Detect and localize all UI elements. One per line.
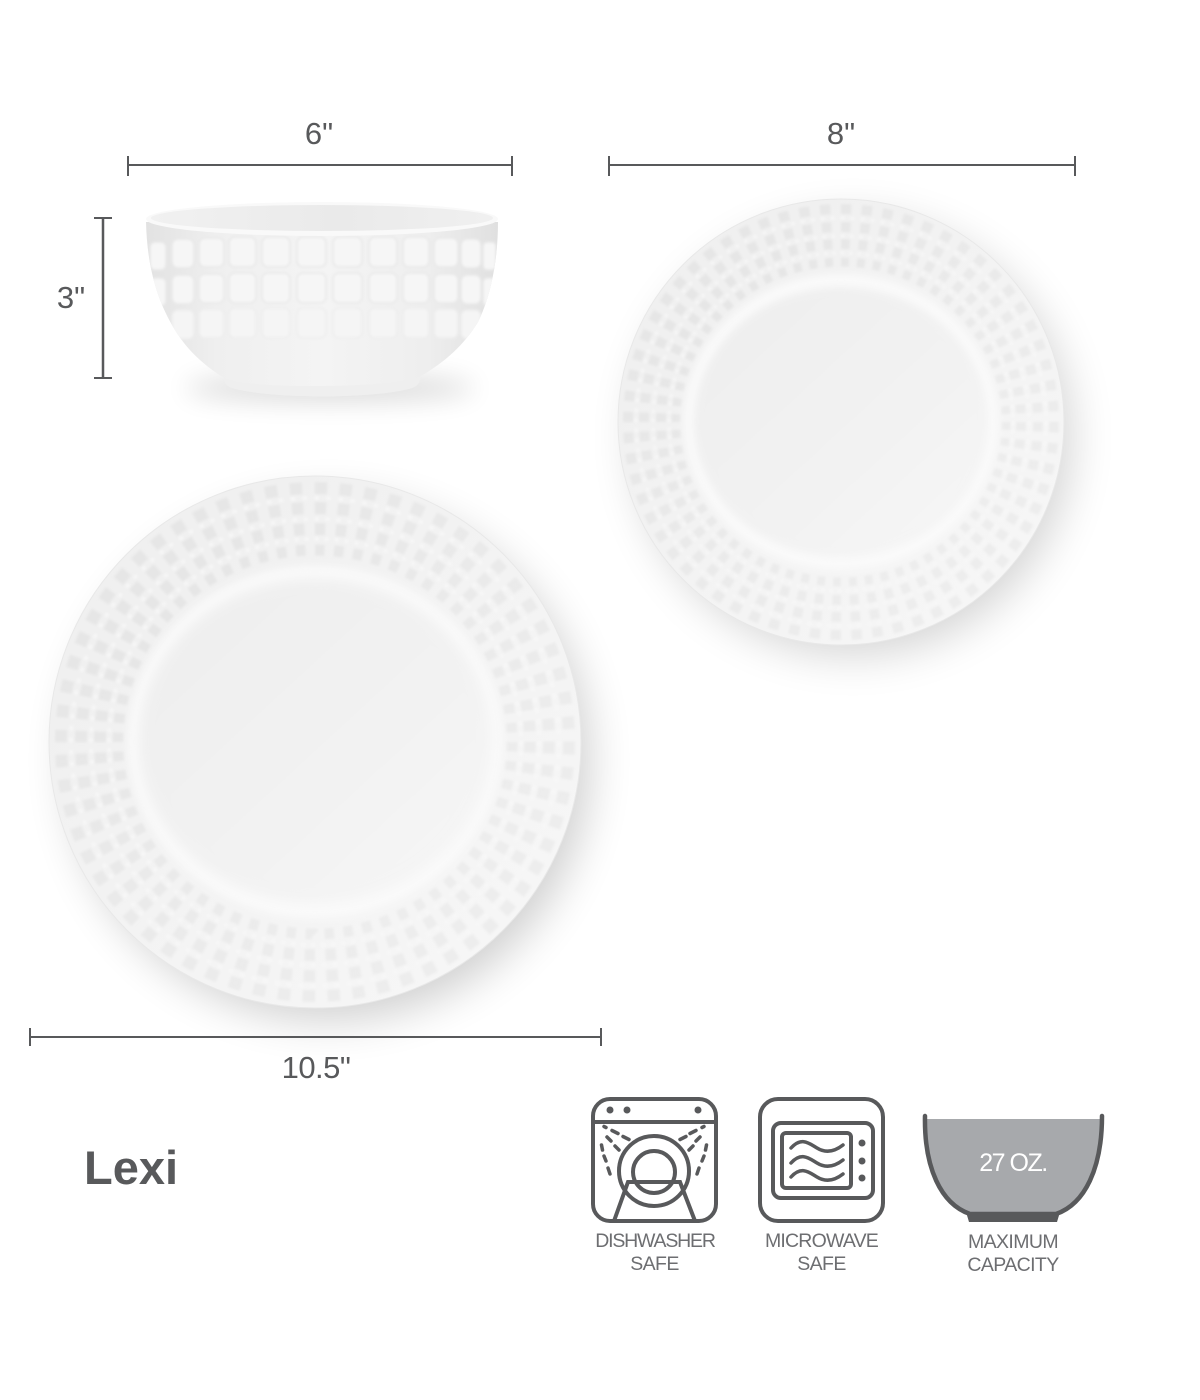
large plate width dimension: 10.5" <box>282 1050 350 1085</box>
icon: bowl capacity <box>925 1116 1102 1222</box>
microwave safe label: SAFE <box>797 1253 846 1275</box>
large dinner plate <box>49 476 589 1020</box>
maximum capacity label: CAPACITY <box>967 1254 1059 1276</box>
dishwasher safe label: DISHWASHER <box>595 1230 716 1252</box>
icon: bowl capacity: 27 OZ. <box>979 1149 1047 1177</box>
bowl width dimension: 6" <box>305 116 333 151</box>
dishwasher safe label: SAFE <box>630 1253 679 1275</box>
icon: microwave safe <box>760 1099 883 1221</box>
bowl illustration <box>146 202 498 401</box>
infographic canvas <box>29 122 1104 1271</box>
bowl height dimension: 3" <box>57 280 85 315</box>
microwave safe label: MICROWAVE <box>765 1230 879 1252</box>
icon: dishwasher safe <box>593 1099 716 1221</box>
small dinner plate <box>618 199 1071 655</box>
small plate width dimension: 8" <box>827 116 855 151</box>
collection name: Lexi <box>84 1141 178 1194</box>
maximum capacity label: MAXIMUM <box>968 1231 1058 1253</box>
